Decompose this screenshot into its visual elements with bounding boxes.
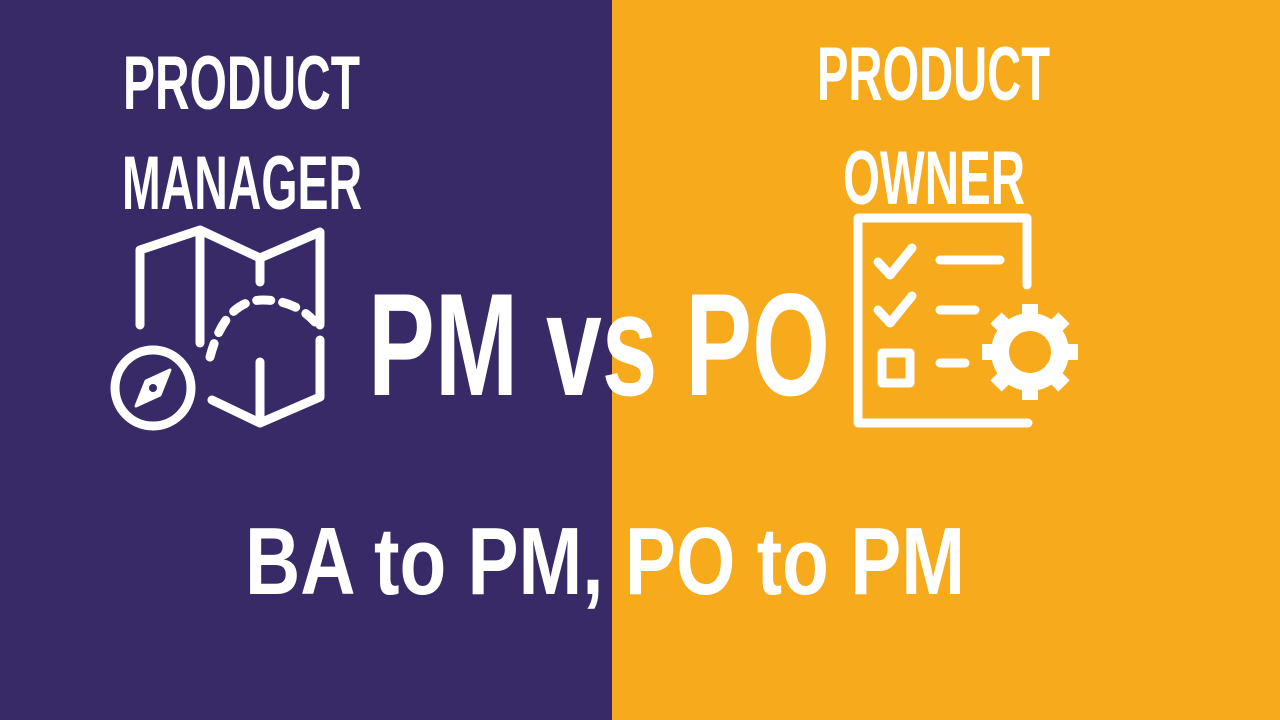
subtitle: BA to PM, PO to PM: BA to PM, PO to PM: [245, 508, 965, 615]
heading: product manager: [122, 41, 362, 226]
panel: right orange background: [612, 0, 1280, 720]
title: PM vs PO: PM vs PO: [368, 263, 830, 426]
panel: left purple background: [0, 0, 612, 720]
icon: checklist with gear: [858, 218, 1078, 423]
heading: product owner: PRODUCT: [817, 32, 1050, 117]
heading: product owner: [817, 32, 1050, 221]
heading: product manager: MANAGER: [122, 141, 362, 226]
icon: map with compass: [115, 230, 320, 426]
heading: product manager: PRODUCT: [123, 41, 360, 126]
heading: product owner: OWNER: [843, 136, 1025, 221]
